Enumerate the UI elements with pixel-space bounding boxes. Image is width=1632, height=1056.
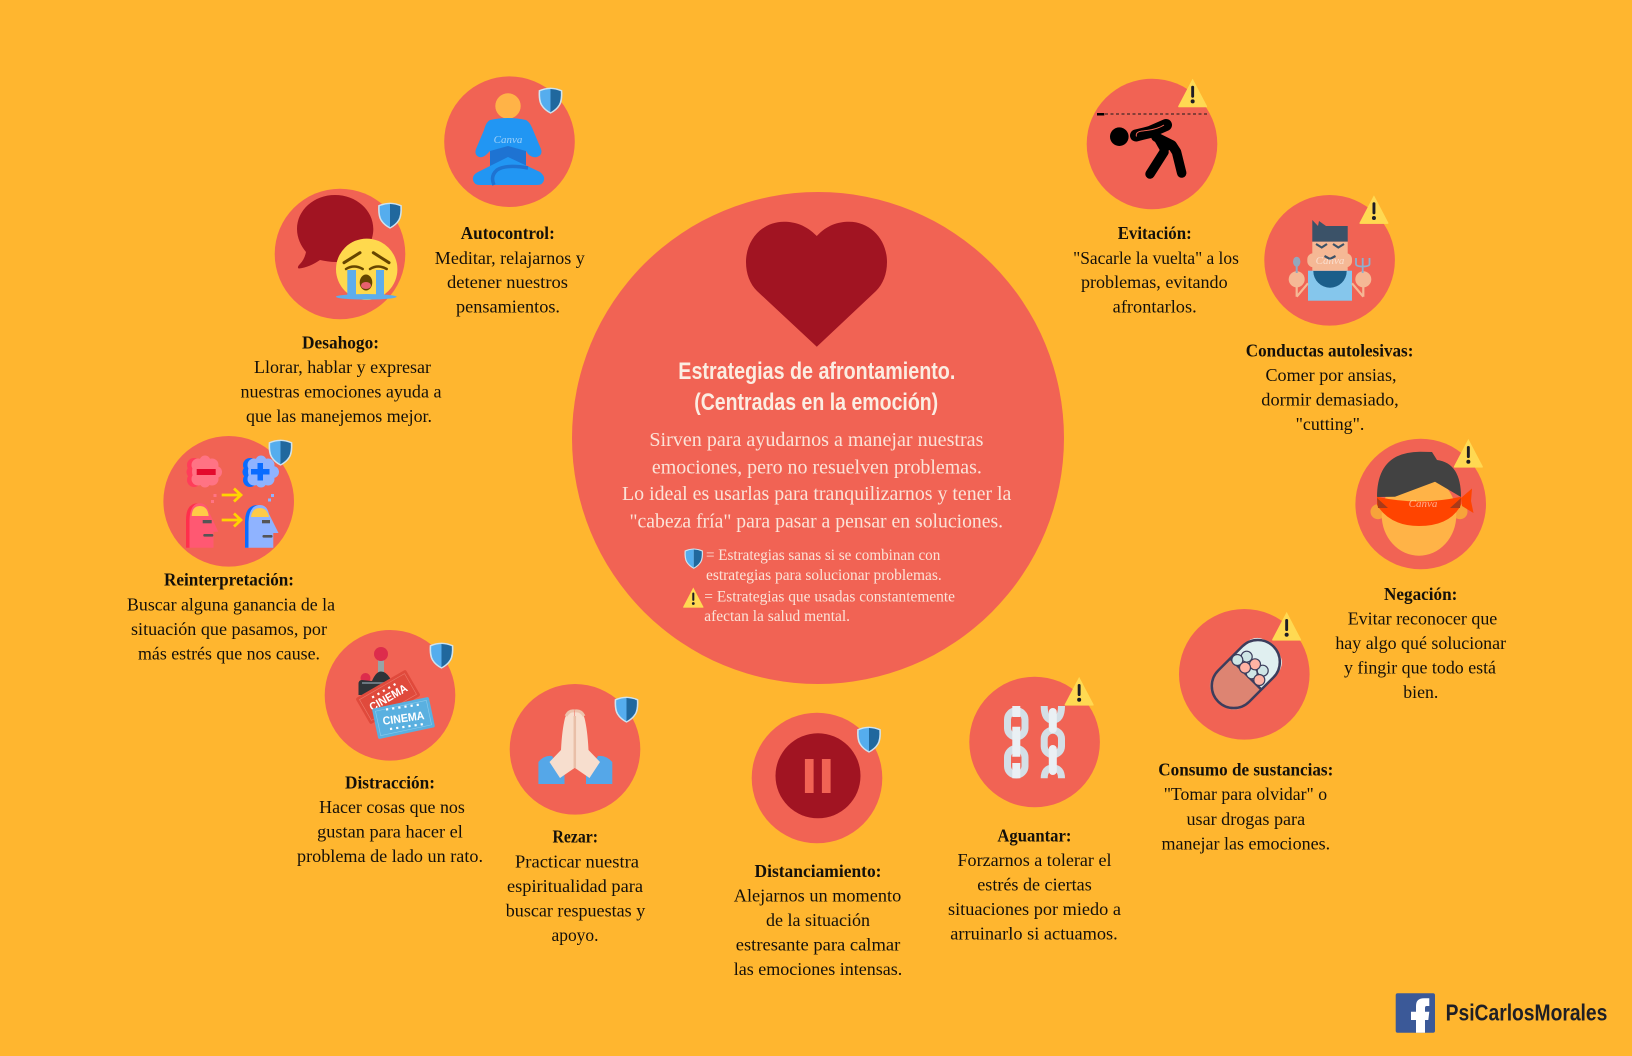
icon: chains: [1008, 706, 1062, 778]
icon: shield: [857, 727, 881, 753]
text: Distracción: Distracción:: [345, 772, 435, 792]
text: Reinterpretación: [127, 570, 335, 664]
panel: Desahogo: [240, 189, 442, 426]
text: Negación: bien.: [1403, 682, 1438, 702]
text: description: Sirven para ayudarnos a manejar nuestras: [649, 429, 984, 451]
icon: warning: [1273, 613, 1301, 640]
icon: negative to positive thoughts: [186, 456, 279, 548]
text: Distanciamiento: [734, 861, 902, 979]
text: Conductas autolesivas: Conductas autolesivas:: [1246, 341, 1413, 361]
panel: central circle: [572, 192, 1064, 684]
text: Distracción: gustan para hacer el: [317, 822, 463, 842]
text: Desahogo: Desahogo:: [302, 332, 379, 352]
panel: Reinterpretación: [127, 436, 335, 664]
text: Autocontrol: Meditar, relajarnos y: [435, 248, 585, 268]
icon: blindfolded face: Canva: [1409, 498, 1438, 510]
text: Distanciamiento: de la situación: [766, 910, 870, 930]
icon: capsule: [1203, 631, 1289, 717]
icon: warning: [1065, 678, 1093, 705]
title: (Centradas en la emoción): [694, 389, 938, 416]
text: Aguantar: [948, 826, 1121, 944]
text: Desahogo: [240, 332, 442, 426]
text: Distracción: Hacer cosas que nos: [319, 797, 465, 817]
icon: warning: [1454, 440, 1482, 467]
text: Rezar: apoyo.: [552, 925, 598, 945]
icon: shield: [269, 440, 292, 466]
icon: person dodging under a limbo bar: [1097, 113, 1208, 174]
panel: Conductas autolesivas: [1246, 195, 1413, 434]
icon: heart: [746, 222, 887, 347]
text: Rezar: buscar respuestas y: [506, 900, 645, 920]
text: Desahogo: Llorar, hablar y expresar: [254, 357, 431, 377]
text: Autocontrol: pensamientos.: [456, 297, 560, 317]
icon: shield: [615, 697, 638, 723]
text: Negación: Evitar reconocer que: [1348, 608, 1497, 628]
icon: pause button: [776, 733, 860, 818]
text: Evitación: "Sacarle la vuelta" a los: [1073, 248, 1239, 268]
icon: shield: [378, 203, 402, 229]
legend: shield: = Estrategias sanas si se combinan con: [706, 547, 941, 564]
text: Distanciamiento: estresante para calmar: [736, 934, 900, 954]
footer: Facebook handle: [1396, 993, 1607, 1033]
icon: man eating: [1289, 220, 1371, 301]
text: description: Lo ideal es usarlas para tranquilizarnos y tener la: [622, 483, 1011, 505]
title: [678, 358, 955, 416]
icon: shield: [430, 643, 453, 669]
icon: praying hands: [538, 711, 612, 784]
text: Distracción: problema de lado un rato.: [297, 846, 483, 866]
text: Rezar: espiritualidad para: [507, 876, 643, 896]
text: Desahogo: nuestras emociones ayuda a: [240, 381, 442, 401]
icon: Facebook: [1396, 993, 1435, 1033]
text: Distanciamiento: Alejarnos un momento: [734, 886, 901, 906]
text: Autocontrol: [435, 223, 585, 317]
text: description: [622, 429, 1011, 532]
panel: Autocontrol: [435, 76, 585, 317]
text: Consumo de sustancias: usar drogas para: [1186, 809, 1305, 829]
legend: warning: = Estrategias que usadas constantemente: [704, 588, 955, 605]
legend: warning: afectan la salud mental.: [704, 608, 850, 625]
text: Evitación: afrontarlos.: [1113, 297, 1197, 317]
text: Negación: Negación:: [1384, 584, 1457, 604]
text: Consumo de sustancias: "Tomar para olvidar" o: [1164, 784, 1327, 804]
icon: warning: [1360, 196, 1388, 224]
text: Reinterpretación: Reinterpretación:: [164, 570, 294, 590]
text: Consumo de sustancias: [1158, 760, 1333, 853]
icon: crying emoji: [336, 239, 397, 300]
text: Autocontrol: detener nuestros: [447, 272, 568, 292]
panel: Rezar: [506, 684, 645, 945]
panel: Evitación: [1073, 79, 1239, 317]
icon: meditating person: Canva: [494, 134, 523, 146]
text: Negación: y fingir que todo está: [1344, 658, 1496, 678]
panel: Aguantar: [948, 677, 1121, 944]
panel: Distanciamiento: [734, 713, 902, 979]
text: Rezar: [506, 827, 645, 945]
text: Aguantar: estrés de ciertas: [977, 875, 1092, 895]
panel: Negación: [1335, 439, 1506, 702]
text: Aguantar: Forzarnos a tolerar el: [958, 850, 1112, 870]
icon: speech bubble: [297, 195, 373, 268]
text: Rezar: Rezar:: [553, 827, 598, 847]
icon: warning: [1179, 80, 1207, 107]
text: Rezar: Practicar nuestra: [515, 851, 639, 871]
text: Reinterpretación: Buscar alguna ganancia de la: [127, 595, 335, 615]
text: Conductas autolesivas: "cutting".: [1296, 414, 1364, 434]
text: description: "cabeza fría" para pasar a pensar en soluciones.: [630, 510, 1003, 532]
panel: Consumo de sustancias: [1158, 609, 1333, 853]
text: Distracción: [297, 772, 483, 866]
text: Aguantar: arruinarlo si actuamos.: [950, 924, 1118, 944]
text: Aguantar: situaciones por miedo a: [948, 899, 1121, 919]
text: Distanciamiento: Distanciamiento:: [754, 861, 882, 881]
text: Desahogo: que las manejemos mejor.: [246, 406, 432, 426]
text: Autocontrol: Autocontrol:: [461, 223, 555, 243]
legend: warning: [683, 588, 955, 625]
text: Negación: hay algo qué solucionar: [1335, 633, 1506, 653]
text: Reinterpretación: situación que pasamos, por: [131, 619, 327, 639]
text: Aguantar: Aguantar:: [997, 826, 1071, 846]
legend: shield: [684, 547, 942, 584]
text: description: emociones, pero no resuelven problemas.: [652, 456, 982, 478]
text: Evitación: problemas, evitando: [1081, 272, 1228, 292]
icon: meditating person: [473, 93, 544, 185]
text: Conductas autolesivas: dormir demasiado,: [1261, 390, 1399, 410]
text: Consumo de sustancias: manejar las emociones.: [1162, 833, 1330, 853]
text: Reinterpretación: más estrés que nos cause.: [138, 644, 320, 664]
icon: blindfolded face: [1370, 452, 1474, 556]
text: Negación: [1335, 584, 1506, 702]
title: Estrategias de afrontamiento.: [678, 358, 955, 385]
text: Evitación: Evitación:: [1118, 223, 1192, 243]
icon: joystick and cinema tickets: CINEMA: [382, 710, 425, 728]
text: Evitación: [1073, 223, 1239, 317]
text: Conductas autolesivas: [1246, 341, 1413, 434]
text: Distanciamiento: las emociones intensas.: [734, 959, 902, 979]
icon: man eating: Canva: [1316, 255, 1345, 267]
text: Consumo de sustancias: Consumo de sustancias:: [1158, 760, 1333, 780]
panel: Distracción: [297, 630, 483, 866]
icon: joystick and cinema tickets: CINEMA: [368, 683, 410, 714]
legend: shield: estrategias para solucionar problemas.: [706, 567, 942, 584]
icon: joystick and cinema tickets: [355, 647, 435, 739]
text: Conductas autolesivas: Comer por ansias,: [1266, 365, 1396, 385]
icon: shield: [539, 88, 562, 114]
